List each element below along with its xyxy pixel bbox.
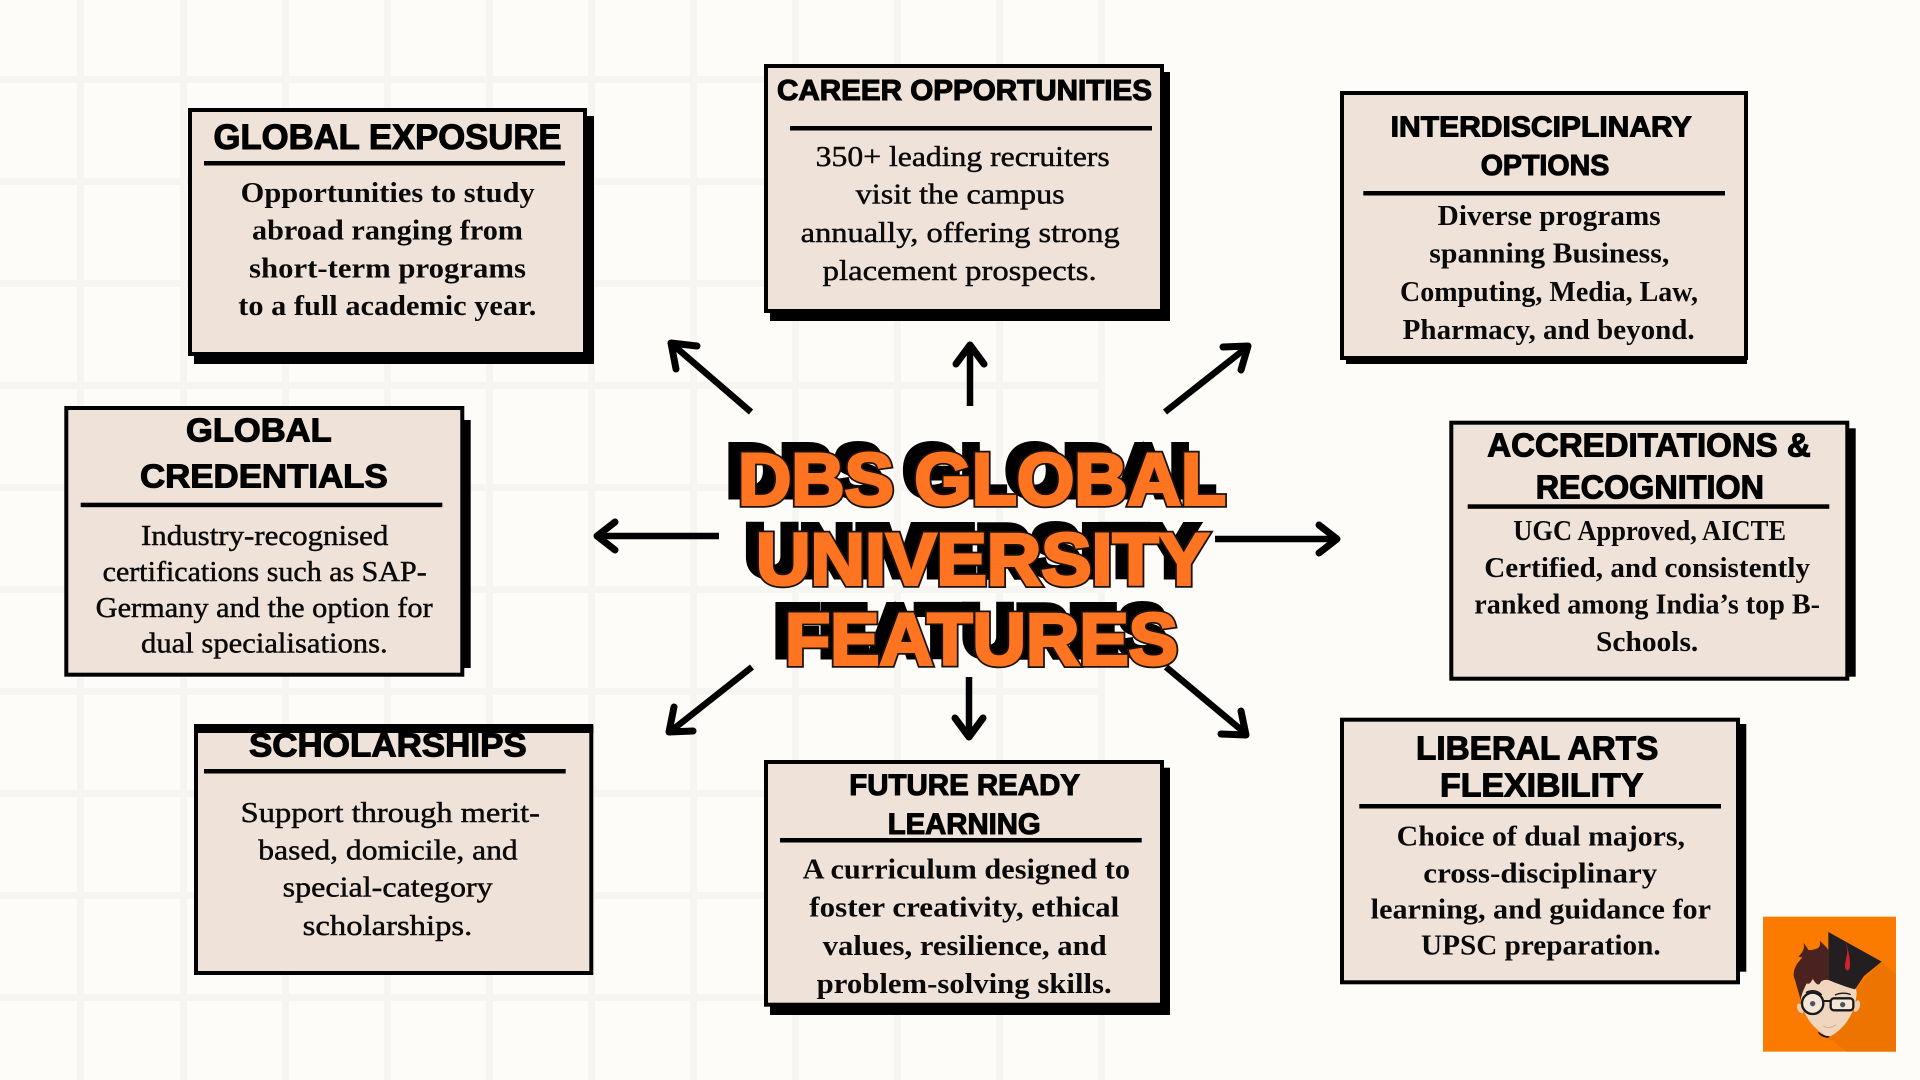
heading: career opportunities: CAREER OPPORTUNITIES	[777, 75, 1152, 107]
heading: global credentials	[140, 412, 388, 495]
heading: accreditations and recognition	[1487, 426, 1811, 506]
heading: interdisciplinary options	[1391, 112, 1692, 182]
text: career opportunities description	[801, 142, 1120, 287]
text: global credentials description: dual specialisations.	[141, 629, 388, 660]
title: DBS Global University Features: FEATURES	[785, 600, 1178, 680]
arrow: to global exposure	[671, 343, 751, 412]
text: future ready description: problem-solving skills.	[817, 969, 1112, 1000]
heading: interdisciplinary options: INTERDISCIPLINARY	[1391, 112, 1692, 144]
panel: career opportunities	[766, 66, 1170, 321]
title: DBS Global University Features	[727, 431, 1226, 680]
panel: interdisciplinary options	[1342, 93, 1747, 364]
arrow: to career opportunities	[956, 345, 984, 406]
arrow: to liberal arts flexibility	[1166, 667, 1246, 735]
title: DBS Global University Features: UNIVERSITY	[756, 520, 1209, 600]
text: global credentials description: Industry-recognised	[141, 521, 388, 552]
heading: liberal arts flexibility: FLEXIBILITY	[1440, 767, 1643, 804]
title: DBS Global University Features: UNIVERSITY	[756, 520, 1209, 600]
text: scholarships description: scholarships.	[303, 911, 472, 942]
text: future ready description	[803, 855, 1130, 1000]
heading: future ready learning: FUTURE READY	[849, 769, 1080, 802]
text: global credentials description	[96, 521, 433, 660]
heading: future ready learning: LEARNING	[888, 808, 1041, 841]
heading: future ready learning	[849, 769, 1080, 841]
text: interdisciplinary description: Pharmacy, and beyond.	[1403, 315, 1695, 346]
text: interdisciplinary description	[1400, 201, 1698, 346]
text: liberal arts description: Choice of dual majors,	[1397, 821, 1685, 852]
panel: future ready learning	[766, 762, 1170, 1015]
arrow: to scholarships	[669, 667, 752, 732]
text: career opportunities description: placement prospects.	[823, 256, 1097, 287]
title: DBS Global University Features: FEATURES	[774, 591, 1167, 672]
panel: accreditations and recognition	[1451, 423, 1856, 679]
text: accreditations description	[1474, 516, 1820, 658]
text: global credentials description: Germany and the option for	[96, 593, 433, 624]
text: liberal arts description: UPSC preparation.	[1421, 930, 1661, 961]
text: scholarships description: based, domicile, and	[258, 835, 518, 866]
text: interdisciplinary description: Computing, Media, Law,	[1400, 277, 1698, 308]
text: liberal arts description: learning, and guidance for	[1371, 894, 1711, 925]
title: DBS Global University Features: DBS GLOBAL	[727, 431, 1215, 512]
heading: global exposure: GLOBAL EXPOSURE	[214, 118, 562, 157]
text: interdisciplinary description: Diverse programs	[1438, 201, 1661, 232]
text: career opportunities description: annually, offering strong	[801, 218, 1120, 249]
text: accreditations description: Certified, and consistently	[1484, 553, 1810, 584]
text: accreditations description: Schools.	[1596, 627, 1698, 658]
text: accreditations description: UGC Approved, AICTE	[1513, 516, 1786, 547]
text: scholarships description: special-category	[283, 873, 493, 904]
panel: global credentials	[66, 408, 471, 675]
heading: liberal arts flexibility	[1416, 729, 1658, 804]
text: global exposure description: abroad ranging from	[252, 216, 523, 246]
title: DBS Global University Features: DBS GLOBAL	[738, 440, 1226, 520]
text: career opportunities description: 350+ leading recruiters	[816, 142, 1110, 173]
arrow: to future ready learning	[955, 677, 983, 737]
text: global exposure description: short-term programs	[249, 254, 526, 284]
text: global exposure description: to a full academic year.	[238, 291, 536, 322]
text: scholarships description	[241, 798, 540, 942]
text: global credentials description: certifications such as SAP-	[103, 557, 427, 588]
heading: accreditations and recognition: RECOGNITION	[1536, 468, 1764, 506]
text: accreditations description: ranked among India’s top B-	[1474, 590, 1820, 621]
text: liberal arts description	[1371, 821, 1711, 961]
text: liberal arts description: cross-disciplinary	[1423, 859, 1657, 890]
panel: global exposure	[190, 110, 594, 364]
text: future ready description: foster creativity, ethical	[809, 893, 1120, 924]
arrow: to global credentials	[597, 522, 719, 550]
text: global exposure description: Opportunities to study	[241, 178, 535, 209]
text: future ready description: A curriculum designed to	[803, 855, 1130, 886]
arrow: to interdisciplinary options	[1165, 346, 1248, 412]
heading: accreditations and recognition: ACCREDITATIONS &	[1487, 426, 1811, 464]
text: interdisciplinary description: spanning Business,	[1429, 239, 1669, 270]
panel: scholarships	[194, 724, 593, 973]
heading: liberal arts flexibility: LIBERAL ARTS	[1416, 729, 1658, 766]
title: DBS Global University Features: UNIVERSITY	[745, 511, 1198, 592]
text: career opportunities description: visit the campus	[856, 180, 1065, 211]
panel: liberal arts flexibility	[1342, 720, 1746, 982]
heading: scholarships: SCHOLARSHIPS	[249, 727, 527, 764]
icon: graduate logo	[1763, 917, 1896, 1052]
title: DBS Global University Features: DBS GLOBAL	[738, 440, 1226, 520]
text: global exposure description	[238, 178, 536, 322]
heading: interdisciplinary options: OPTIONS	[1481, 150, 1609, 182]
title: DBS Global University Features: FEATURES	[785, 600, 1178, 680]
text: future ready description: values, resilience, and	[823, 931, 1107, 962]
heading: global credentials: CREDENTIALS	[140, 458, 388, 495]
heading: global credentials: GLOBAL	[186, 412, 332, 449]
text: scholarships description: Support through merit-	[241, 798, 540, 829]
arrow: to accreditations	[1215, 525, 1337, 553]
